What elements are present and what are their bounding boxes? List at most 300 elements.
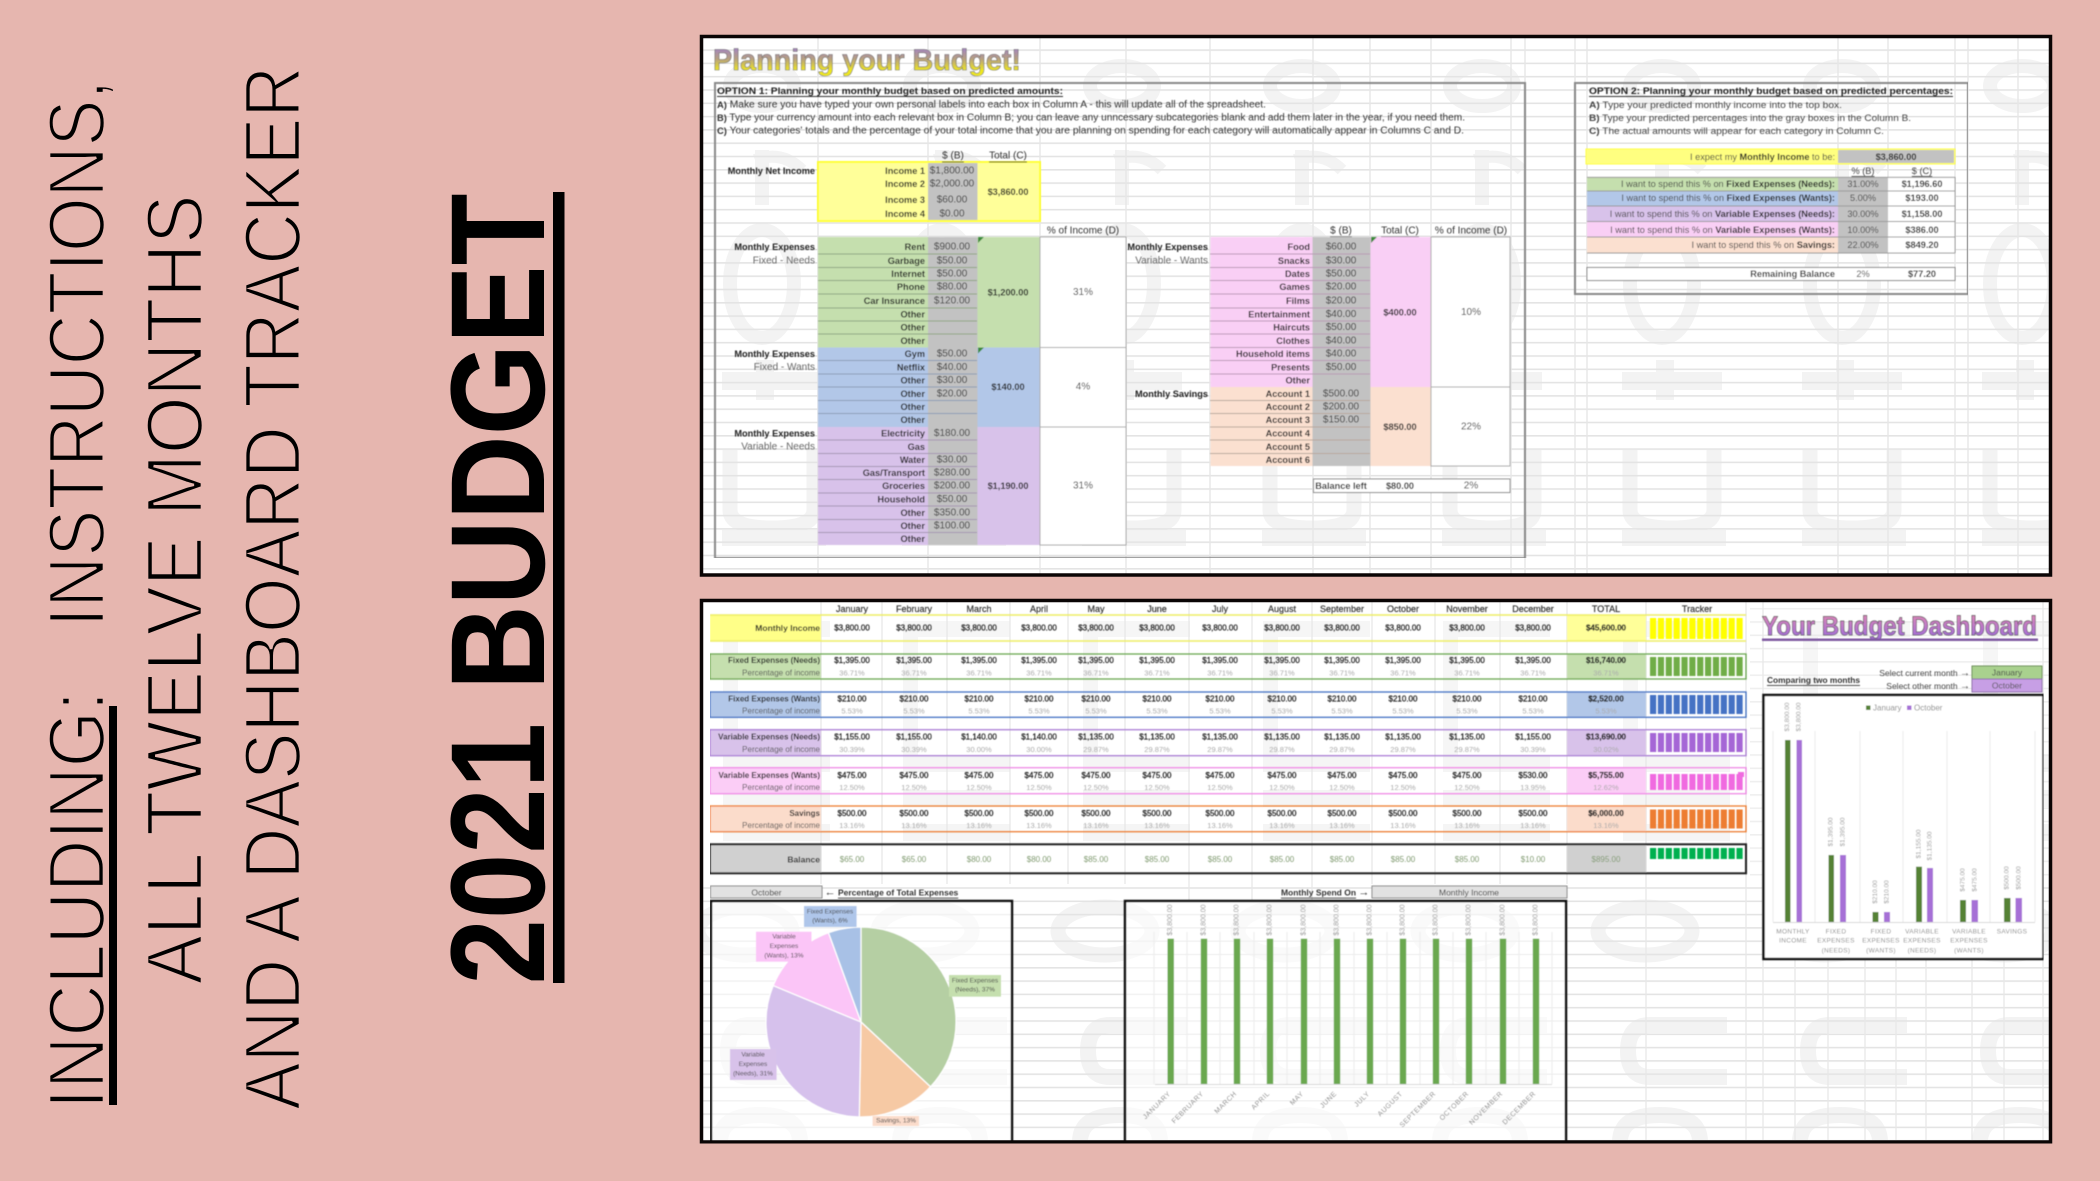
pie label: fixed needs: (Needs), 37% [955, 986, 995, 994]
row: variable expenses wants: $475.00 [1206, 771, 1235, 780]
row: fixed expenses needs: $1,395.00 [834, 656, 870, 665]
month axis labels: AUGUST [1377, 1090, 1405, 1118]
bar values: $1,395.00 [1828, 817, 1834, 846]
pie label: variable wants: Expenses [770, 943, 799, 950]
row: fixed expenses needs: 36.71% [1207, 668, 1233, 678]
balance left row: $80.00 [1386, 481, 1414, 491]
row: monthly income: $3,800.00 [1021, 624, 1057, 632]
row: variable expenses wants: 12.50% [1329, 783, 1355, 792]
category axis labels: MONTHLY [1776, 928, 1810, 936]
row: variable expenses needs: $1,135.00 [1139, 732, 1175, 742]
table: savings: $850.00 [1383, 422, 1417, 432]
row: savings: $500.00 [838, 809, 867, 818]
month headers: October [1387, 604, 1419, 614]
row: fixed expenses needs: 36.71% [1083, 668, 1109, 678]
option 1 instructions: A) Make sure you have typed your own personal labels into each box in Column A - this will update all of the spreadsheet. [717, 100, 1266, 110]
row: fixed expenses wants: $210.00 [1143, 694, 1172, 704]
row: variable expenses needs: $1,135.00 [1324, 732, 1360, 742]
bar values: $3,800.00 [1300, 904, 1308, 936]
row: variable expenses wants: 12.50% [1269, 783, 1295, 792]
row: variable expenses wants: 12.50% [1390, 783, 1416, 792]
row: savings: Percentage of income [742, 821, 821, 830]
income table: $3,860.00 [988, 187, 1028, 197]
table: variable needs: Other [900, 534, 925, 544]
monthly income input [1586, 149, 1955, 164]
table: variable wants: Entertainment [1248, 310, 1310, 320]
row: savings: $6,000.00 [1588, 809, 1624, 818]
month axis labels: MAY [1289, 1091, 1305, 1107]
category axis labels: VARIABLE [1952, 928, 1986, 936]
table: variable wants: Other [1285, 376, 1310, 386]
row: monthly income: $3,800.00 [1264, 624, 1300, 632]
month headers [836, 604, 1712, 614]
table: fixed needs: Internet [891, 269, 925, 279]
row: variable expenses wants: 13.95% [1520, 783, 1546, 792]
row: variable expenses wants: $475.00 [1143, 771, 1172, 780]
table: fixed wants: $50.00 [937, 348, 968, 360]
month axis labels: SEPTEMBER [1399, 1091, 1437, 1129]
row: fixed expenses needs: $16,740.00 [1586, 656, 1627, 665]
percentage table: $1,196.60 [1902, 179, 1942, 189]
income table [728, 150, 1040, 221]
row: monthly income: $3,800.00 [1139, 624, 1175, 632]
table: fixed needs: Rent [905, 242, 925, 252]
remaining balance row: $77.20 [1908, 269, 1936, 279]
category axis labels: (WANTS) [1954, 948, 1984, 954]
bar values: $3,800.00 [1784, 702, 1791, 731]
category axis labels: SAVINGS [1997, 928, 2028, 936]
column headers: Total (C) [1381, 226, 1419, 236]
category axis labels: INCOME [1779, 938, 1807, 944]
row: fixed expenses wants: 5.53% [1595, 706, 1617, 716]
income table: $ (B) [942, 150, 964, 162]
row: fixed expenses wants: $210.00 [965, 694, 994, 704]
month axis labels: JUNE [1319, 1091, 1338, 1110]
row: savings: Savings [789, 809, 821, 818]
pie label: fixed needs [949, 975, 1001, 997]
table: savings: $500.00 [1323, 388, 1360, 400]
row: savings: $500.00 [1389, 809, 1418, 818]
month headers: July [1212, 604, 1228, 614]
row: fixed expenses needs: 36.71% [1269, 668, 1295, 678]
comparing two months selector: Comparing two months [1767, 675, 1860, 685]
table: variable wants: Clothes [1276, 336, 1310, 346]
balance left row: Balance left [1315, 481, 1367, 491]
row: variable expenses needs: 29.87% [1454, 745, 1480, 754]
row: variable expenses wants: 12.62% [1593, 783, 1619, 792]
pie label: variable wants [756, 932, 812, 962]
table: variable needs: Gas/Transport [863, 468, 925, 478]
row: fixed expenses needs: 36.71% [1593, 668, 1619, 678]
row: variable expenses needs: 30.00% [1026, 745, 1052, 754]
table: fixed wants: $30.00 [937, 375, 968, 386]
bar values: $3,800.00 [1167, 904, 1174, 936]
column headers: % of Income (D) [1435, 226, 1507, 236]
category axis labels [1776, 928, 2028, 954]
balance left row [1314, 479, 1510, 492]
month headers: September [1320, 604, 1364, 614]
table: variable needs: Gas [908, 442, 925, 452]
category axis labels: FIXED [1826, 928, 1846, 936]
month headers: December [1512, 604, 1554, 614]
row: savings: 13.16% [1454, 821, 1480, 830]
heading: your budget dashboard: Your Budget Dashboard [1762, 611, 2037, 641]
bar values: $210.00 [1872, 880, 1879, 904]
row: balance: $80.00 [1027, 855, 1052, 864]
row: savings [710, 806, 1746, 832]
bar values: $3,800.00 [1234, 904, 1240, 936]
bar values: $3,800.00 [1266, 904, 1274, 936]
row: balance: $10.00 [1521, 855, 1546, 864]
percentage table: 5.00% [1850, 193, 1876, 203]
legend: January [1873, 704, 1901, 712]
category axis labels: (NEEDS) [1908, 948, 1936, 954]
row: monthly income: $3,800.00 [1515, 624, 1551, 632]
row: variable expenses needs: 30.39% [839, 745, 865, 754]
percentage table: % (B) [1852, 166, 1874, 176]
income table: $0.00 [939, 208, 965, 220]
table: fixed wants: Fixed - Wants [754, 362, 815, 373]
table: variable wants: $50.00 [1326, 268, 1357, 280]
table: variable wants: $50.00 [1326, 362, 1357, 373]
row: balance [710, 844, 1746, 873]
percentage table: 30.00% [1847, 209, 1879, 219]
row: fixed expenses wants: 5.53% [1028, 706, 1050, 716]
heading: percentage of total expenses: ← Percentage of Total Expenses [825, 887, 959, 899]
monthly income input: I expect my Monthly Income to be: [1690, 152, 1835, 162]
left heading: including list [32, 66, 317, 1110]
row: balance: $85.00 [1391, 855, 1416, 864]
pie label: variable needs: Expenses [739, 1061, 768, 1068]
table: fixed needs: Other [900, 310, 925, 320]
row: variable expenses wants: $475.00 [1082, 771, 1111, 780]
table: variable needs: Other [900, 521, 925, 531]
row: savings: $500.00 [1453, 809, 1482, 818]
row: fixed expenses wants: $210.00 [1082, 694, 1111, 704]
percentage table: $386.00 [1905, 225, 1939, 235]
option 2 instructions: B) Type your predicted percentages into the gray boxes in the Column B. [1589, 113, 1911, 123]
table: fixed wants: $40.00 [937, 362, 968, 373]
table: fixed needs: $80.00 [937, 282, 968, 292]
percentage table [1587, 166, 1955, 253]
table: variable needs: Other [900, 508, 925, 518]
text: INCLUDING: INCLUDING: [32, 691, 121, 1109]
table: fixed needs: Car Insurance [864, 296, 925, 306]
bars [1168, 939, 1539, 1084]
row: fixed expenses wants: $210.00 [1025, 694, 1054, 704]
row: variable expenses wants: 12.50% [839, 783, 865, 792]
row: savings: 13.16% [1083, 821, 1109, 830]
row: fixed expenses wants: 5.53% [1271, 706, 1293, 716]
row: fixed expenses wants: $2,520.00 [1588, 694, 1624, 704]
month axis labels: NOVEMBER [1468, 1091, 1504, 1127]
table: savings: 22% [1461, 422, 1481, 432]
pie label: variable wants: Variable [772, 934, 796, 940]
row: fixed expenses wants: $210.00 [1453, 694, 1482, 704]
table: variable needs: 31% [1073, 480, 1093, 492]
row: fixed expenses wants: 5.53% [1456, 706, 1478, 716]
table: fixed wants: $20.00 [937, 388, 968, 400]
table: savings: Account 6 [1266, 455, 1310, 465]
row: savings: $500.00 [1206, 809, 1235, 818]
table: variable wants: $20.00 [1326, 296, 1357, 306]
row: fixed expenses wants: $210.00 [1389, 694, 1418, 704]
October bars [1796, 740, 2022, 922]
month headers: June [1147, 604, 1167, 614]
row: savings: 13.16% [1026, 821, 1052, 830]
bar values: $475.00 [1972, 868, 1978, 892]
month headers: January [836, 604, 869, 614]
table: variable needs [734, 427, 1126, 545]
heading: planning your budget: Planning your Budget! [713, 44, 1021, 77]
table: fixed needs: $50.00 [937, 256, 968, 266]
row: balance: $895.00 [1592, 855, 1621, 864]
panel: monthly tracker and dashboard spreadsheet [701, 600, 2051, 1146]
row: fixed expenses wants: 5.53% [1331, 706, 1353, 716]
row: variable expenses needs: 30.39% [1520, 745, 1546, 754]
slice: fixed wants [828, 927, 861, 1022]
row: variable expenses needs: $1,155.00 [834, 732, 870, 742]
month headers: April [1030, 604, 1048, 614]
table: fixed wants: Other [900, 415, 925, 425]
row: fixed expenses wants: 5.53% [1209, 706, 1231, 716]
row: variable expenses needs: 29.87% [1390, 745, 1416, 754]
table: savings: Account 1 [1266, 389, 1310, 399]
table: fixed needs: $120.00 [934, 296, 971, 306]
table: variable wants: Variable - Wants [1135, 256, 1208, 266]
comparing two months selector: January [1992, 668, 2023, 678]
row: savings: $500.00 [965, 809, 994, 818]
slice: savings [859, 1022, 930, 1117]
pie label: variable needs: Variable [741, 1052, 765, 1058]
text: INSTRUCTIONS: INSTRUCTIONS, [32, 80, 121, 627]
bar values: $210.00 [1884, 880, 1890, 904]
percentage table: 31.00% [1847, 179, 1879, 189]
selector: October: October [751, 888, 782, 898]
month headers: TOTAL [1592, 604, 1620, 614]
table: variable wants: $50.00 [1326, 322, 1357, 333]
bar values: $3,800.00 [1200, 904, 1208, 936]
option 1 box [715, 83, 1525, 558]
month headers: May [1087, 604, 1105, 614]
row: savings: $500.00 [1082, 809, 1111, 818]
month headers: Tracker [1682, 604, 1712, 614]
table: fixed wants: 4% [1076, 382, 1090, 392]
table: variable needs: $30.00 [937, 454, 968, 466]
table: variable wants: Food [1288, 242, 1310, 252]
row: fixed expenses needs: $1,395.00 [1078, 656, 1114, 665]
row: variable expenses needs: 29.87% [1144, 745, 1170, 754]
row: variable expenses needs: $13,690.00 [1586, 732, 1627, 742]
row: variable expenses needs: 29.87% [1207, 745, 1233, 754]
table: fixed needs: Garbage [888, 256, 925, 266]
row: monthly income: $3,800.00 [896, 624, 932, 632]
slice: variable needs [766, 986, 861, 1117]
selector: monthly income: Monthly Income [1439, 888, 1499, 898]
row: variable expenses needs: 30.39% [901, 745, 927, 754]
table: variable needs: Household [878, 494, 925, 504]
table: variable wants: $40.00 [1326, 309, 1357, 320]
month axis labels [1142, 1090, 1537, 1129]
bar values [1784, 702, 2022, 904]
category axis labels: EXPENSES [1817, 938, 1855, 944]
month axis labels: JULY [1353, 1091, 1371, 1109]
percentage table: I want to spend this % on Variable Expenses (Needs): [1610, 209, 1835, 219]
row: savings: 13.16% [901, 821, 927, 830]
row: fixed expenses needs: $1,395.00 [1139, 656, 1175, 665]
row: balance: $85.00 [1145, 855, 1170, 864]
option 1 instructions: C) Your categories' totals and the percentage of your total income that you are planning on spending for each category will automatically appear in Columns C and D. [717, 126, 1464, 136]
table: variable wants: Games [1279, 282, 1310, 292]
table: variable wants: $40.00 [1326, 348, 1357, 360]
month axis labels: JANUARY [1142, 1091, 1172, 1121]
row: monthly income: $3,800.00 [834, 624, 870, 632]
monthly spend bar chart [1125, 901, 1566, 1146]
table: variable needs: $350.00 [934, 508, 971, 518]
row: variable expenses wants: Variable Expenses (Wants) [718, 771, 820, 780]
row: variable expenses needs: 30.02% [1593, 745, 1619, 754]
row: savings: 13.16% [1329, 821, 1355, 830]
row: savings: $500.00 [1519, 809, 1548, 818]
monthly income input: $3,860.00 [1876, 152, 1916, 162]
row: monthly income: $3,800.00 [1385, 624, 1421, 632]
income table: Total (C) [989, 150, 1027, 162]
row: fixed expenses needs: 36.71% [1026, 668, 1052, 678]
table: variable needs: $50.00 [937, 494, 968, 505]
row: variable expenses needs: $1,135.00 [1264, 732, 1300, 742]
income table: Income 1 [885, 166, 925, 176]
selector: monthly income [1372, 886, 1567, 898]
bar values: $3,800.00 [1334, 904, 1340, 936]
row: variable expenses wants: $475.00 [1328, 771, 1357, 780]
row: monthly income: $45,600.00 [1586, 624, 1627, 632]
option 2 instructions [1589, 86, 1953, 136]
bar values: $475.00 [1960, 868, 1966, 892]
table: variable wants: Monthly Expenses [1127, 242, 1208, 252]
row: variable expenses wants: $475.00 [1389, 771, 1418, 780]
income table: Income 3 [885, 195, 925, 205]
income table: $2,000.00 [930, 178, 975, 190]
row: variable expenses wants: $5,755.00 [1588, 771, 1624, 780]
row: balance: $85.00 [1208, 855, 1233, 864]
page margin below spreadsheet [699, 1144, 2054, 1181]
month headers: March [966, 604, 992, 614]
heading: monthly spend on: Monthly Spend On → [1281, 887, 1369, 899]
table: fixed needs: 31% [1073, 287, 1093, 298]
row: fixed expenses needs: 36.71% [966, 668, 992, 678]
row: balance: $85.00 [1330, 855, 1355, 864]
row: variable expenses needs: $1,140.00 [1021, 732, 1057, 742]
category axis labels: EXPENSES [1950, 938, 1988, 944]
row: variable expenses wants: 12.50% [1207, 783, 1233, 792]
option 1 instructions: B) Type your currency amount into each relevant box in Column B; you can leave any unncessary subcategories blank and add them later in the year, if you need them. [717, 112, 1465, 124]
row: fixed expenses wants: $210.00 [900, 694, 929, 704]
comparing two months selector: Select other month → [1886, 680, 1970, 692]
pie label: fixed needs: Fixed Expenses [952, 978, 999, 984]
row: fixed expenses needs: $1,395.00 [896, 656, 932, 665]
row: fixed expenses needs: 36.71% [1390, 668, 1416, 678]
row: variable expenses wants: 12.50% [1026, 783, 1052, 792]
row: variable expenses wants: 12.50% [1083, 783, 1109, 792]
table: savings: Account 3 [1266, 415, 1310, 425]
row: balance: Balance [787, 854, 820, 864]
month axis labels: DECEMBER [1502, 1091, 1537, 1126]
row: balance: $65.00 [902, 855, 927, 864]
pie label: savings: Savings, 13% [876, 1118, 916, 1124]
table: variable wants: $400.00 [1383, 308, 1417, 318]
table: variable needs: Water [900, 455, 925, 465]
table: fixed needs: Fixed - Needs [753, 256, 815, 266]
percentage table: I want to spend this % on Variable Expenses (Wants): [1610, 225, 1835, 235]
row: variable expenses wants: $475.00 [965, 771, 994, 780]
legend [1866, 704, 1943, 712]
table: variable wants: Films [1286, 296, 1310, 306]
row: monthly income: Monthly Income [755, 623, 820, 633]
row: variable expenses wants: 12.50% [1144, 783, 1170, 792]
percentage table: I want to spend this % on Savings: [1691, 240, 1835, 250]
income table: Income 2 [885, 179, 925, 189]
bar values: $3,800.00 [1796, 702, 1802, 731]
option 2 instructions: C) The actual amounts will appear for each category in Column C. [1589, 126, 1884, 136]
column headers: $ (B) [1330, 226, 1352, 236]
row: savings: $500.00 [900, 809, 929, 818]
percentage table: 10.00% [1847, 225, 1879, 235]
pie label: variable needs [730, 1049, 777, 1080]
row: fixed expenses wants: $210.00 [838, 694, 867, 704]
table: fixed needs: $900.00 [934, 242, 971, 252]
row: savings: 13.16% [1207, 821, 1233, 830]
option 2 instructions: OPTION 2: Planning your monthly budget based on predicted percentages: [1589, 86, 1953, 96]
row: fixed expenses wants: 5.53% [1392, 706, 1414, 716]
row: fixed expenses needs: $1,395.00 [1021, 656, 1057, 665]
percentage table: I want to spend this % on Fixed Expenses (Wants): [1621, 193, 1835, 203]
row: savings: 13.16% [966, 821, 992, 830]
row: monthly income: $3,800.00 [1078, 624, 1114, 632]
table: variable wants: 10% [1461, 307, 1481, 318]
row: fixed expenses needs: 36.71% [839, 668, 865, 678]
category axis labels: (NEEDS) [1822, 948, 1850, 954]
table: fixed needs: $50.00 [937, 268, 968, 280]
row: fixed expenses wants: Fixed Expenses (Wants) [728, 694, 820, 704]
row: variable expenses wants: $475.00 [900, 771, 929, 780]
row: fixed expenses needs: $1,395.00 [1515, 656, 1551, 665]
table: savings: Monthly Savings [1135, 389, 1208, 399]
table: variable needs: Monthly Expenses [734, 428, 815, 438]
row: monthly income [710, 615, 1746, 641]
comparing two months selector [1767, 666, 2042, 692]
pie label: fixed wants: Fixed Expenses [807, 908, 854, 916]
row: balance: $85.00 [1084, 855, 1109, 864]
row: variable expenses needs: 29.87% [1083, 745, 1109, 754]
table: variable wants [1127, 237, 1510, 387]
bar values: $3,800.00 [1400, 904, 1406, 936]
bar values: $500.00 [2016, 866, 2022, 890]
row: savings: 13.16% [1520, 821, 1546, 830]
row: fixed expenses needs: $1,395.00 [961, 656, 997, 665]
table: savings [1135, 387, 1510, 466]
table: fixed wants: $140.00 [991, 382, 1025, 392]
row: fixed expenses needs: 36.71% [1329, 668, 1355, 678]
remaining balance row: Remaining Balance [1750, 269, 1835, 279]
row: variable expenses needs: 30.00% [966, 745, 992, 754]
title: 2021 budget: 2021 BUDGET [424, 194, 573, 984]
row: variable expenses needs: 29.87% [1329, 745, 1355, 754]
row: fixed expenses wants: $210.00 [1268, 694, 1297, 704]
table: fixed wants: Netflix [897, 362, 926, 372]
pie label: variable needs: (Needs), 31% [733, 1070, 773, 1078]
table: fixed needs: $1,200.00 [988, 288, 1028, 298]
table: variable needs: $1,190.00 [988, 481, 1028, 491]
